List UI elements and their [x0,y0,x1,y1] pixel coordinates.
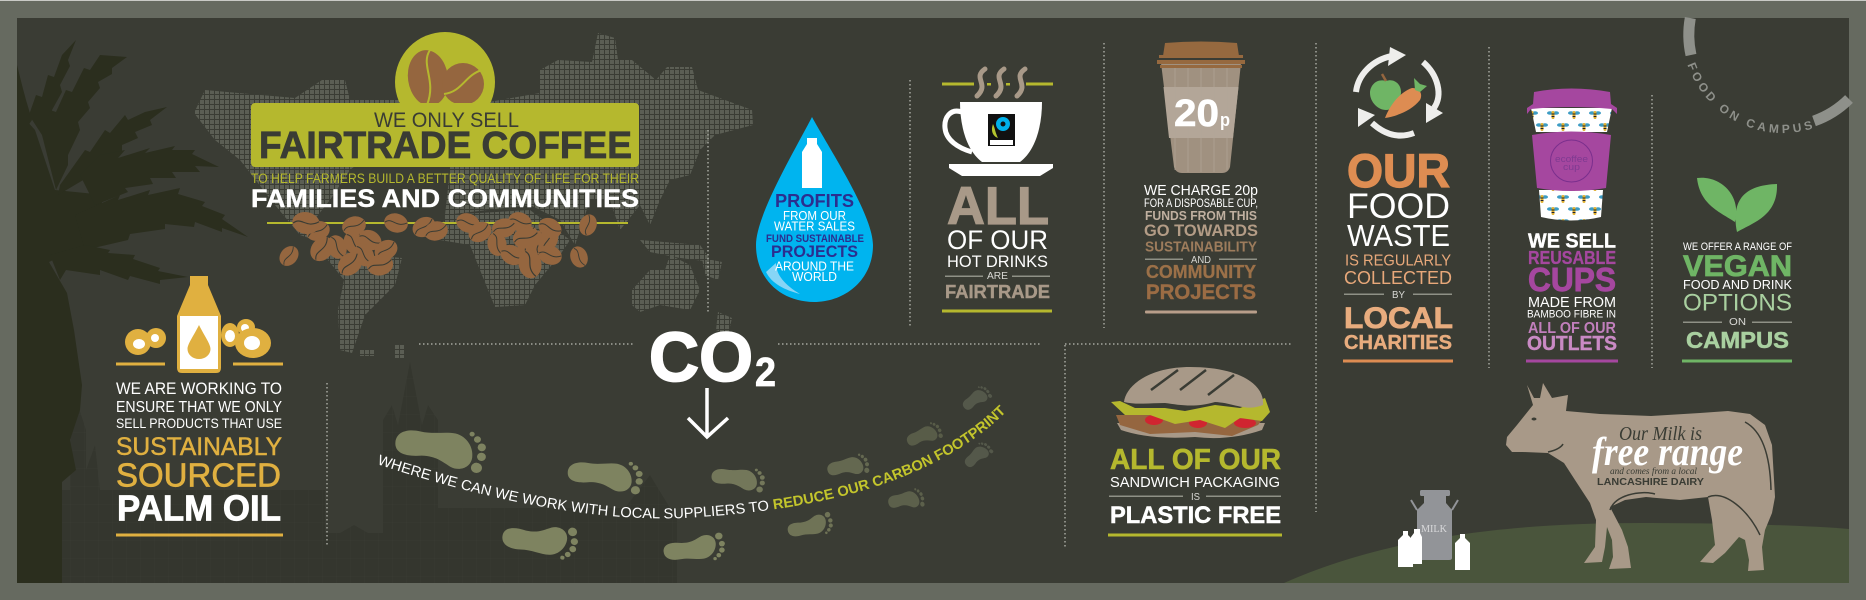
panel: water drop [756,117,873,302]
text block: sandwich packaging: SANDWICH PACKAGING [1110,474,1280,491]
panel: palm oil [116,276,283,536]
icon: paper cup [1157,42,1245,173]
panel: food waste [1343,47,1453,362]
heading: TO HELP FARMERS BUILD A BETTER QUALITY OF LIFE FOR THEIR [251,170,639,186]
text block: all of our hot drinks: HOT DRINKS [947,252,1048,271]
text block: food waste: BY [1392,290,1405,301]
text block: vegan: CAMPUS [1686,327,1789,353]
badge: food on campus: FOOD ON CAMPUS [1688,62,1812,134]
text block: palm oil: SOURCED [116,456,281,494]
text block: 20p charge [1144,182,1258,304]
text block: profits: WATER SALES [774,218,855,234]
text block: food waste [1344,144,1453,354]
text block: reusable cups: BAMBOO FIBRE IN [1527,308,1616,320]
text block: profits: FROM OUR [783,208,846,223]
text block: food waste: LOCAL [1344,302,1453,335]
heading [251,109,639,213]
icon: palm fruits [125,319,271,358]
text block: palm oil [116,379,282,528]
heading: FAIRTRADE COFFEE [259,125,632,167]
arrow: down [688,388,728,437]
panel: sandwich [1108,367,1282,536]
panel: fairtrade coffee [251,32,639,280]
text block: food waste: IS REGULARLY [1345,252,1451,270]
text block: sandwich packaging: PLASTIC FREE [1110,502,1281,529]
text block: profits: PROFITS [775,191,854,211]
icon: milk churn and bottles: MILK [1421,524,1448,535]
text block: vegan: VEGAN [1683,250,1792,283]
text block: sandwich packaging: ALL OF OUR [1110,444,1281,476]
text block: vegan: OPTIONS [1683,290,1792,316]
text block: food waste: CHARITIES [1344,332,1452,354]
cow text: free range [1592,429,1743,474]
icon: coffee cup [945,102,1053,176]
text block: sandwich packaging: IS [1191,492,1200,503]
text block: 20p charge: FOR A DISPOSABLE CUP, [1144,198,1258,210]
text block: reusable cups: OUTLETS [1527,333,1617,355]
text block: all of our hot drinks: ARE [987,271,1008,282]
text block: palm oil: PALM OIL [117,488,281,528]
heading: CO2: CO [649,318,753,396]
text block: palm oil: ENSURE THAT WE ONLY [116,399,282,416]
heading: FAMILIES AND COMMUNITIES [251,185,639,213]
text block: vegan: FOOD AND DRINK [1683,277,1792,292]
heading: WE ONLY SELL [374,109,519,132]
icon: water bottle [802,138,822,188]
panel: carbon footprint [380,318,1004,560]
text block: reusable cups: MADE FROM [1528,294,1616,311]
banner [251,103,639,167]
palm tree [17,40,248,583]
text block: all of our hot drinks [945,177,1050,302]
text block: 20p charge: GO TOWARDS [1144,221,1258,240]
text block: reusable cups: CUPS [1528,261,1616,298]
text block: reusable cups: ALL OF OUR [1528,320,1616,337]
icon: steam [977,69,1025,96]
cow text: and comes from a local [1610,466,1698,476]
icon: apple and carrot [1370,74,1427,118]
badge: food on campus [1683,17,1853,134]
text block: 20p charge: FUNDS FROM THIS [1145,208,1257,223]
text block: profits: AROUND THE [775,258,854,274]
text block: 20p charge: AND [1191,255,1211,266]
text block: food waste: WASTE [1347,218,1450,253]
hill [1284,523,1849,583]
text block: profits: PROJECTS [771,242,858,261]
cow text [1592,423,1743,488]
dotted world map [194,33,753,358]
text block: profits [766,191,864,284]
icon: sandwich [1111,367,1270,438]
text block: vegan [1683,241,1792,353]
heading: CO2: 2 [755,349,776,395]
text block: palm oil: WE ARE WORKING TO [116,379,282,398]
text block: profits: WORLD [792,269,837,284]
text block: sandwich packaging [1109,444,1281,529]
text block: reusable cups [1527,230,1617,355]
icon: cow [1506,383,1775,571]
cow text: Our Milk is [1619,423,1702,445]
text block: vegan: ON [1729,317,1746,328]
text block: all of our hot drinks: OF OUR [947,225,1048,255]
icon: paper cup: 20 [1174,93,1219,135]
text block: profits: FUND SUSTAINABLE [766,233,864,245]
icon: drop highlight [766,263,800,294]
icon: recycling arrows [1356,47,1443,136]
text block: 20p charge: PROJECTS [1146,281,1256,304]
icon: scattered coffee beans [276,209,600,280]
cow text: LANCASHIRE DAIRY [1597,476,1704,488]
icon: coffee beans badge [395,32,495,132]
icon: paper cup: p [1220,110,1230,130]
icon: ecoffee cup [1527,88,1617,220]
building silhouette [61,362,677,583]
text block: palm oil: SUSTAINABLY [116,433,282,461]
icon: drop [756,117,873,302]
text block: palm oil: SELL PRODUCTS THAT USE [116,415,282,431]
text block: 20p charge: WE CHARGE 20p [1144,182,1258,199]
text block: food waste: OUR [1347,144,1450,197]
text block: 20p charge: SUSTAINABILITY [1145,240,1257,256]
panel: 20p disposable cup [1144,42,1258,314]
icon: oil bottle [177,276,221,373]
panel: hot drinks [942,69,1053,312]
text block: all of our hot drinks: FAIRTRADE [945,282,1050,302]
icon: ecoffee cup: cup [1563,162,1580,172]
icon: milk churn and bottles [1398,490,1470,570]
text block: food waste: FOOD [1347,187,1450,226]
text block: vegan: WE OFFER A RANGE OF [1683,241,1792,253]
text block: all of our hot drinks: ALL [947,177,1049,236]
text block: food waste: COLLECTED [1344,268,1452,288]
text block: 20p charge: COMMUNITY [1146,262,1256,282]
text block: reusable cups: WE SELL [1528,230,1616,252]
icon: leaves [1697,178,1777,232]
icon: ecoffee cup: ecoffee [1555,154,1588,164]
panel: vegan [1682,178,1792,362]
panel: reusable cups [1526,88,1618,362]
text block: reusable cups: REUSABLE [1528,248,1616,268]
curved text: reduce our carbon footprint: WHERE WE CAN WE WORK WITH LOCAL SUPPLIERS TO REDUCE OUR CARBON FOOTPRINT [380,404,1004,518]
icon: footprints [394,383,995,562]
